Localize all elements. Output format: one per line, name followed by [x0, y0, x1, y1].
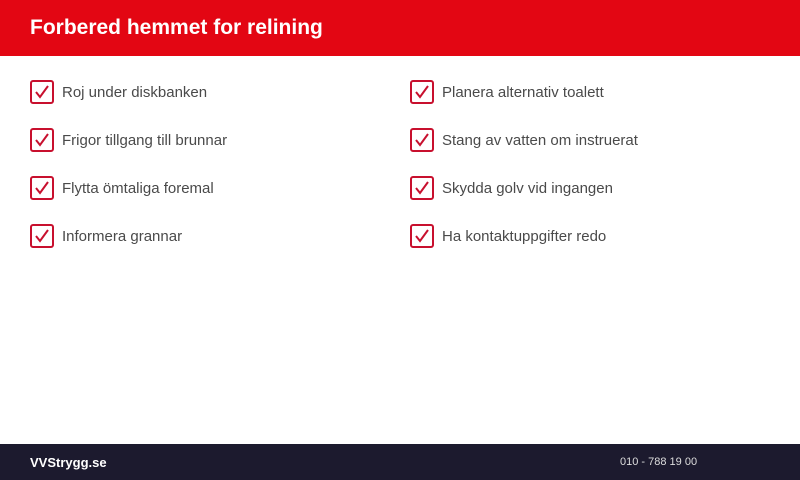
- title: Forbered hemmet for relining: [30, 16, 323, 39]
- item 6: Stang av vatten om instruerat: [442, 132, 638, 149]
- item 8: [410, 224, 606, 248]
- item 1: Roj under diskbanken: [62, 84, 207, 101]
- item 7: [410, 176, 613, 200]
- item 3: [30, 176, 214, 200]
- footer: [0, 444, 800, 480]
- item 4: Informera grannar: [62, 228, 182, 245]
- item 5: [410, 80, 604, 104]
- item 4: [30, 224, 182, 248]
- item 2: Frigor tillgang till brunnar: [62, 132, 227, 149]
- item 6: [410, 128, 638, 152]
- item 7: Skydda golv vid ingangen: [442, 180, 613, 197]
- item 5: Planera alternativ toalett: [442, 84, 604, 101]
- header: [0, 0, 800, 56]
- phone: 010 - 788 19 00: [620, 456, 697, 468]
- item 2: [30, 128, 227, 152]
- item 3: Flytta ömtaliga foremal: [62, 180, 214, 197]
- item 1: [30, 80, 207, 104]
- brand: VVStrygg.se: [30, 455, 107, 470]
- checklist: [30, 80, 638, 248]
- item 8: Ha kontaktuppgifter redo: [442, 228, 606, 245]
